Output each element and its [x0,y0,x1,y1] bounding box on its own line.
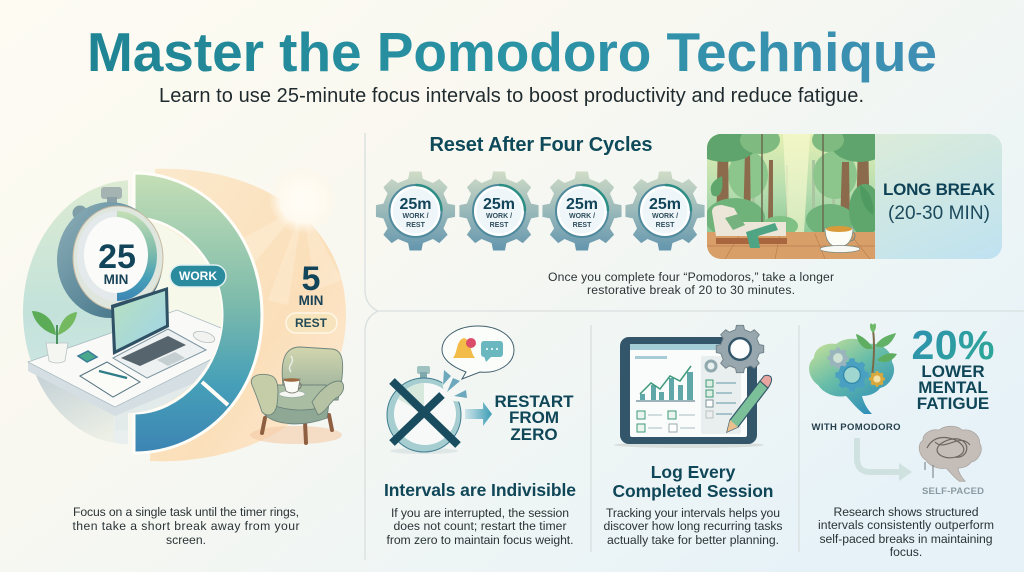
gear: cycle 2: WORK / [486,213,512,220]
label: work [170,265,226,287]
text block: If you are interrupted, the session [391,506,569,520]
label: restart from zero: RESTART [494,392,574,411]
plant [32,311,77,363]
label: lower mental fatigue: MENTAL [918,378,988,397]
gear: cycle 1: WORK / [402,213,429,220]
icon: gear [716,325,764,373]
text block: self-paced breaks in maintaining [820,532,992,546]
stopwatch: MIN [104,272,128,287]
stopwatch [57,187,163,318]
sticky notes [78,351,97,362]
text block [818,505,994,559]
timer value: 25 [98,238,136,276]
text block: from zero to maintain focus weight. [386,533,574,547]
gear: cycle 3: WORK / [569,213,595,220]
stat: 20 percent: 20% [912,322,994,368]
icon: tangled brain [919,426,981,481]
icon: tablet with chart [614,337,764,448]
text block: focus caption: then take a short break away from your [72,519,300,533]
label: restart from zero: FROM [509,408,559,427]
text block: does not count; restart the timer [394,519,566,533]
text block: actually take for better planning. [607,533,779,547]
mouse [192,329,216,345]
gear: cycle 2 [459,171,539,251]
desk [27,310,221,444]
text block [386,506,574,547]
gear: cycle 4: 25m [649,196,681,213]
sun [240,166,342,305]
gear: cycle 3 [542,171,622,251]
gear: cycle 4: REST [656,222,675,229]
label: lower mental fatigue [917,362,989,413]
heading [612,462,774,501]
panel: work and rest cycle [20,166,346,461]
label: 5 min: MIN [299,293,323,308]
heading: Completed Session [612,481,774,501]
subtitle: Learn to use 25-minute focus intervals to boost productivity and reduce fatigue. [159,85,864,107]
gear: cycle 3: 25m [566,196,598,213]
panel: intervals are indivisible [384,326,576,547]
text block: discover how long recurring tasks [604,519,782,533]
icon: pencil [727,375,772,432]
label: with pomodoro: WITH POMODORO [812,422,900,433]
label: rest: REST [295,316,328,330]
icon: broken stopwatch [387,366,467,454]
text block [604,506,782,547]
label: work: WORK [179,269,217,283]
text block: focus caption: Focus on a single task until the timer rings, [73,505,299,519]
gear: cycle 4: WORK / [652,213,678,220]
text block: long break description: Once you complete four “Pomodoros,” take a longer [548,270,834,284]
rest arc [150,169,346,461]
gear: cycle 2: 25m [483,196,515,213]
label: 5 min: 5 [302,260,320,298]
label: restart from zero: ZERO [510,425,558,444]
work arc [134,173,262,453]
heading: reset after four cycles: Reset After Four Cycles [430,134,652,156]
text block: long break description: restorative break of 20 to 30 minutes. [587,283,795,297]
armchair with tea [250,347,344,444]
laptop [111,287,206,378]
gear: cycle 1: REST [406,222,426,229]
heading: Log Every [651,462,736,482]
gear: cycle 4 [625,171,705,251]
text block: long break description [548,270,834,297]
heading: Intervals are Indivisible [384,480,576,500]
label: long break: LONG BREAK [883,180,996,199]
arrow [465,402,492,426]
work circle background [23,180,128,360]
title: Master the Pomodoro Technique [87,21,937,83]
panel: long break card: (20-30 MIN) [888,203,990,224]
label: 5 min [299,260,323,308]
arrow: to self-paced [857,438,912,481]
gear: cycle 1: 25m [399,196,432,213]
label: rest [286,313,337,333]
forest illustration [707,134,875,259]
label: lower mental fatigue: LOWER [921,362,985,381]
gear: cycle 2: REST [490,222,509,229]
notebook [80,362,140,397]
text block: focus. [890,545,922,559]
text block: Research shows structured [834,505,978,519]
panel: log every completed session [604,325,782,547]
icon: speech bubble with notifications [442,326,514,379]
label: lower mental fatigue: FATIGUE [917,394,989,413]
text block: intervals consistently outperform [818,518,994,532]
label: restart from zero [494,392,574,444]
panel: lower mental fatigue [809,322,994,559]
text block: focus caption: screen. [166,533,206,547]
panel: long break card [707,134,1002,259]
icon: healthy brain [809,323,897,414]
text block: focus caption [72,505,300,547]
gear: cycle 1 [376,171,455,251]
text block: Tracking your intervals helps you [606,506,780,520]
label: self-paced: SELF-PACED [922,486,984,497]
gear: cycle 3: REST [573,222,592,229]
